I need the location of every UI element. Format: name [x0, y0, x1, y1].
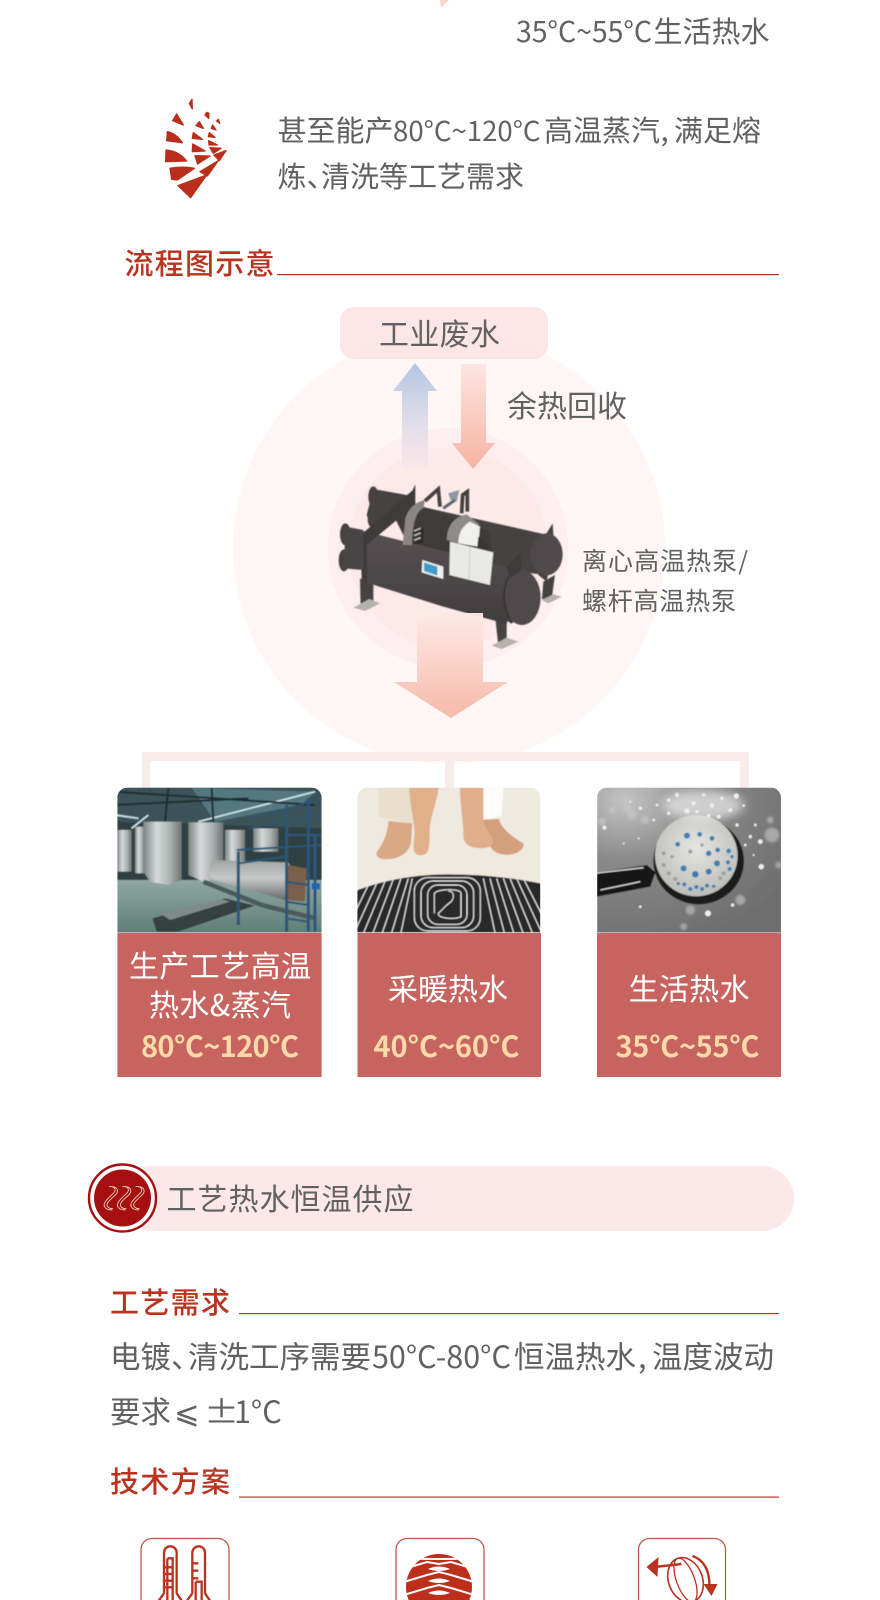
card: heating hot water	[357, 788, 541, 1077]
heading: process requirement: 工艺需求	[110, 1280, 230, 1322]
icon: heat waves badge	[89, 1164, 156, 1232]
compressor rings	[403, 500, 425, 545]
white panel	[449, 542, 493, 585]
box: industrial waste water: 工业废水	[379, 310, 500, 354]
card: domestic hot water	[597, 785, 787, 1077]
arrow: down pink	[452, 364, 495, 469]
label: heat pump type	[582, 542, 748, 618]
machine: heat pump	[339, 484, 563, 649]
arrow: up blue	[393, 363, 437, 468]
photo: feet on underfloor heating	[357, 788, 540, 932]
text: requirement body: 电镀、	[110, 1333, 202, 1377]
text: steam description	[278, 108, 761, 196]
background heat circles	[233, 332, 665, 764]
icon: red flame fan	[166, 99, 226, 198]
arrow: big down	[394, 613, 508, 718]
icon: striped sphere	[396, 1538, 484, 1600]
card: process hot water: 生产工艺高温	[129, 942, 311, 986]
card: heating hot water: 采暖热水	[388, 965, 508, 1009]
text: steam description: 清洗等工艺需求	[321, 154, 524, 196]
text: requirement body: ±	[204, 1389, 239, 1432]
text: 35-55 degree domestic hot water: 生活热水	[654, 9, 770, 51]
label: heat pump type: 螺杆高温热泵	[582, 582, 736, 618]
card: domestic hot water: 生活热水	[628, 965, 750, 1009]
card: heating hot water: 40°C~60°C	[374, 1024, 520, 1066]
icon: circulation arrows	[638, 1538, 726, 1600]
icon: thermometers	[141, 1538, 229, 1600]
text: requirement body: 1°C	[234, 1388, 282, 1432]
label panel	[117, 933, 322, 1077]
section header: process hot water constant temperature	[89, 1164, 794, 1232]
label: heat pump type: 离心高温热泵/	[582, 542, 748, 578]
touch screen	[422, 560, 443, 579]
arrow tip remnant at top	[440, 0, 449, 8]
heading: flow chart: 流程图示意	[124, 241, 274, 283]
header text: 工艺热水恒温供应	[166, 1175, 414, 1219]
pill background	[120, 1166, 794, 1231]
card: process hot water	[115, 785, 328, 1077]
card: process hot water: 80°C~120°C	[141, 1024, 299, 1066]
text: steam description: 甚至能产	[278, 108, 394, 150]
pipes	[425, 489, 467, 513]
spray haze	[664, 790, 744, 820]
photo: factory	[115, 785, 328, 935]
heading: technical solution: 技术方案	[110, 1459, 230, 1501]
label panel	[597, 933, 781, 1077]
connector lines	[142, 752, 749, 790]
text: steam description: 高温蒸汽	[544, 108, 660, 150]
underfloor mat	[355, 874, 545, 933]
card: process hot water: 热水&蒸汽	[149, 981, 291, 1025]
label panel	[358, 933, 541, 1077]
box: industrial waste water	[340, 307, 548, 359]
text: requirement body: ⩽	[174, 1388, 200, 1432]
text: steam description: 炼、	[278, 154, 336, 196]
text: steam description: 80°C~120°C	[393, 109, 541, 149]
label: heat recovery: 余热回收	[507, 382, 627, 426]
photo: shower head	[597, 785, 787, 935]
compressor body	[390, 502, 493, 565]
text: requirement body: 恒温热水	[514, 1333, 636, 1377]
text: requirement body	[110, 1333, 774, 1432]
front vessel	[363, 531, 512, 624]
flow diagram	[142, 307, 749, 790]
text: steam description: 满足熔	[674, 108, 761, 150]
card: domestic hot water: 35°C~55°C	[616, 1024, 760, 1066]
text: requirement body: 清洗工序需要	[188, 1333, 371, 1377]
text: requirement body: 温度波动	[652, 1333, 774, 1377]
text: 35-55 degree domestic hot water: 35°C~55°C	[516, 10, 652, 51]
text: requirement body: 50°C-80°C	[372, 1333, 511, 1377]
text: requirement body: 要求	[110, 1388, 171, 1432]
text: requirement body: ,	[638, 1333, 646, 1377]
text: steam description: ,	[660, 108, 669, 150]
rear vessel and legs	[360, 484, 563, 646]
